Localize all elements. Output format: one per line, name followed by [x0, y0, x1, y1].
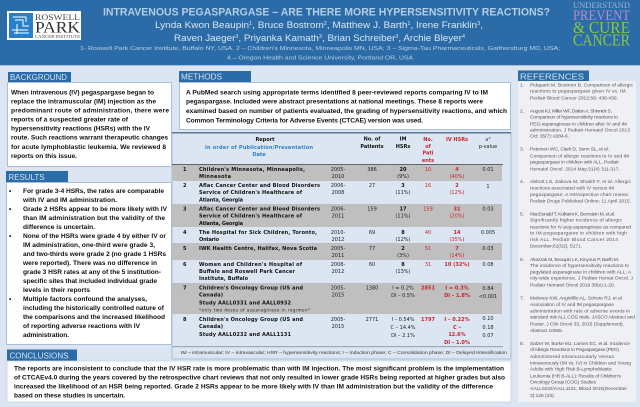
- table header: HSRs: [396, 144, 410, 150]
- reference 3: Hematol Oncol. 2014 May;31(4) 311-317.: [530, 167, 620, 173]
- panel: results: RESULTS: [8, 173, 44, 182]
- row 8: 2005-: [331, 317, 345, 323]
- row 6: 10 (32%): [444, 262, 470, 268]
- row 3: 2006-: [331, 206, 345, 212]
- row 6: Institute, Buffalo: [199, 276, 249, 282]
- panel: background: reports of a suspected greater rate of: [11, 116, 129, 124]
- reference 8: Intravenously (IM vs. IV) in Children and Young: [530, 360, 631, 366]
- row 7: 2015: [332, 292, 344, 298]
- panel: results: For grade 3-4 HSRs, the rates are comparable: [23, 188, 164, 195]
- affiliations line 1: 1- Roswell Park Cancer Institute, Buffalo NY, USA, 2 – Children's Minnesota, Minneapolis MN, USA; 3 – Sigma-Tau Pharmaceuticals, Gaithersburg MD, USA;: [80, 46, 561, 52]
- reference 7: Abstract 10065.: [530, 328, 563, 334]
- row 4: 14: [454, 230, 461, 236]
- row 6: Buffalo and Roswell Park Cancer: [199, 269, 296, 275]
- row 8: 8: [183, 317, 187, 323]
- panel: results: [6, 171, 172, 344]
- row 7: Children's Oncology Group (US and: [199, 286, 303, 292]
- reference 4: Pediatr Drugs Published Online: 11 April 2015.: [530, 199, 631, 205]
- row 7: [183, 286, 497, 312]
- panel: results: Multiple factors confound the analyses,: [23, 296, 147, 303]
- row 1: 2005-: [331, 167, 345, 173]
- table header: ents: [422, 158, 434, 164]
- reference 4: reactions associated with IV versus IM: [530, 186, 614, 192]
- panel: methods: examined based on number of patients evaluated, the grading of hypersensitivity reactions, and which: [186, 108, 507, 115]
- reference 7: 7.: [520, 296, 524, 302]
- logo: Roswell Park: CANCER INSTITUTE: [35, 34, 80, 39]
- row 3: Aflac Cancer Center and Blood Disorders: [199, 206, 320, 212]
- reference 6: The incidence of hypersensitivity reactions to: [530, 263, 629, 269]
- row 7: 7: [183, 286, 187, 292]
- row 2: (11%): [395, 190, 411, 196]
- panel: methods: A PubMed search using appropriate terms identified 8 peer-reviewed reports comparing IV to IM: [186, 90, 488, 96]
- panel: conclusions: CONCLUSIONS: [10, 352, 68, 360]
- reference 1: [520, 83, 634, 102]
- panel: conclusions: increased the likelihood of an HSR being reported. Grade 2 HSRs appear to be more likely with IV than IM administration but the validity of the difference: [14, 384, 493, 390]
- reference 4: 4.: [520, 179, 524, 185]
- row 5: IWK Health Centre, Halifax, Nova Scotia: [199, 246, 317, 252]
- panel: conclusions: [7, 350, 511, 402]
- row 6: 31: [425, 262, 431, 268]
- row 7: I = 0.2%: [392, 286, 414, 292]
- row 5: 77: [369, 246, 375, 252]
- row 2: 2: [455, 183, 459, 189]
- row 8: DI – 1.0%: [444, 340, 470, 346]
- panel: results table: [172, 132, 511, 359]
- row 1: (40%): [449, 174, 465, 180]
- row 7: I = 0.3%: [445, 286, 469, 292]
- row 7: DI – 1.8%: [444, 293, 470, 299]
- authors line 2: , Priyanka Kamath: [238, 33, 319, 43]
- row 1: 10: [425, 167, 431, 173]
- row 1: [183, 167, 494, 180]
- panel: background: [8, 72, 172, 166]
- panel: results: •: [9, 233, 12, 240]
- panel: results: grade 3 HSR rates at any of the 5 institution-: [23, 269, 161, 276]
- row 5: 7: [455, 246, 459, 252]
- row 2: 16: [425, 183, 431, 189]
- row 8: [183, 316, 494, 346]
- row 4: 4: [183, 230, 187, 236]
- row 4: (12%): [395, 237, 411, 243]
- row 4: [183, 230, 495, 243]
- row 3: 2011: [332, 214, 344, 220]
- reference 6: 6.: [520, 257, 524, 263]
- panel: conclusions: based on these studies is uncertain.: [14, 392, 125, 400]
- row 4: 69: [369, 230, 375, 236]
- reference 8: Administered Intramuscularly Versus: [530, 354, 615, 360]
- reference 1: reactions to pegaspargase given IV vs. IM.: [530, 88, 627, 94]
- row 1: 4: [455, 167, 459, 173]
- panel: background: reports on this issue.: [11, 153, 77, 160]
- row 5: 0.03: [482, 246, 494, 252]
- reference 6: pegylated asparaginase in children with ALL: A: [530, 269, 632, 275]
- row 6: 2012: [332, 269, 344, 275]
- row 3: 159: [367, 206, 377, 212]
- panel: conclusions: The reports are inconsistent to conclude that the IV HSR rate is more problematic than with IM injection. The most significant problem is the implementation: [14, 366, 504, 372]
- row 7: Study AALL0331 and AALL0932: [199, 300, 292, 306]
- panel: references: REFERENCES: [520, 72, 584, 82]
- reference 5: [520, 212, 631, 250]
- row 2: [183, 183, 490, 204]
- row 5: 2011: [332, 253, 344, 259]
- panel: background: hypersensitivity reactions (HSRs) with the IV: [11, 126, 151, 132]
- authors line 2: 3: [235, 34, 239, 40]
- row 3: (11%): [395, 214, 411, 220]
- row 6: 0.08: [482, 262, 494, 268]
- table header: No.: [423, 137, 433, 143]
- panel: background: When intravenous (IV) pegaspargase began to: [11, 90, 154, 96]
- panel: results: IM administration, one-third were grade 3,: [23, 242, 155, 249]
- reference 1: 1.: [520, 83, 524, 89]
- reference 5: risk ALL. Pediatr Blood Cancer 2014: [530, 237, 618, 243]
- row 6: (13%): [395, 269, 411, 275]
- authors line 1: 2: [324, 21, 327, 27]
- reference 8: [520, 341, 631, 399]
- reference 5: MacDonald T, Kulkarni K, Bernstein M, et.al.: [530, 212, 615, 218]
- heading: methods: [179, 71, 251, 82]
- reference 2: PEG-asparaginase in children after IV and IM: [530, 122, 627, 128]
- reference 3: Peterson WC, Clark D, Senn SL, et al.: [530, 147, 609, 153]
- table header: IM: [400, 136, 406, 142]
- row 6: 6: [183, 262, 187, 268]
- row 6: 2008-: [331, 262, 345, 268]
- row 7: 1380: [366, 286, 378, 292]
- row 8: 0.07: [482, 333, 494, 339]
- row 7: DI – 0.5%: [391, 293, 415, 299]
- row 5: [183, 246, 494, 259]
- row 3: (20%): [449, 214, 465, 220]
- authors line 2: 4: [462, 34, 465, 40]
- reference 7: Poster. J Clin Oncol 33, 2015 (Supplement).: [530, 322, 624, 328]
- panel: background: BACKGROUND: [10, 73, 67, 82]
- table header: x²: [485, 137, 490, 143]
- panel: background: route. Such reactions warrant therapeutic changes: [11, 134, 168, 142]
- reference 8: of Allergic Reactions to Pegaspargase (PEG): [530, 347, 619, 353]
- table legend: IM – intramuscular; IV – intravascular; HSR – hypersensitivity reactions; I – Induction phase; C – Consolidation phase; DI – Delayed Intensification: [181, 350, 507, 355]
- reference 8: Adults with High Risk B-Lymphoblastic: [530, 367, 613, 373]
- row 8: I – 0.22%: [444, 317, 470, 323]
- row 5: 2005-: [331, 246, 345, 252]
- table header: IV HSRs: [446, 137, 468, 143]
- table header: Date: [252, 152, 266, 158]
- row 2: 1: [486, 184, 490, 190]
- row 2: Atlanta, Georgia: [199, 198, 243, 204]
- panel: results: difference is uncertain.: [23, 224, 95, 231]
- row 8: 0.18: [482, 325, 494, 331]
- row 1: 2010: [332, 174, 344, 180]
- authors line 1: ,: [480, 20, 483, 30]
- logo: Understand Prevent and Cure Cancer: CANCER: [573, 30, 631, 50]
- reference 3: pegaspargase in children with ALL. Pediatr: [530, 160, 619, 166]
- authors line 2: , Brian Schreiber: [322, 33, 395, 43]
- reference 8: Oncology Group (COG) Studies: [530, 380, 597, 386]
- authors line 1: , Matthew J. Barth: [327, 20, 407, 30]
- panel: results: •: [9, 188, 12, 195]
- panel: results: Grade 2 HSRs appear to be more likely with IV: [23, 206, 168, 213]
- panel: results: of reporting adverse reactions with IV: [23, 323, 141, 330]
- table header: [205, 136, 497, 164]
- row 5: 5: [183, 246, 187, 252]
- row 7: *only two doses of asparaginase in regimen*: [199, 308, 310, 312]
- panel: results: than IM administration but the validity of the: [23, 215, 165, 222]
- row 2: 3: [401, 183, 405, 189]
- row 4: Ontario: [199, 237, 220, 243]
- row 2: Service of Children's Healthcare of: [199, 190, 303, 196]
- panel: methods: Common Terminology Criteria for Adverse Events (CTCAE) version was used.: [186, 117, 423, 124]
- row 8: 1797: [421, 317, 435, 323]
- row 3: Atlanta, Georgia: [199, 221, 243, 227]
- panel: background: replace the intramuscular (IM) injection as the: [11, 98, 156, 106]
- panel: background: for acute lymphoblastic leukemia. We reviewed 8: [11, 144, 166, 151]
- row 8: 0.10: [482, 316, 494, 322]
- row 3: 159: [423, 206, 433, 212]
- logo: Roswell Park: ROSWELL: [35, 12, 80, 22]
- authors line 1: 1: [407, 21, 411, 27]
- reference 7: Maloney KW, Angiolillo AL, Schore RJ, et al.: [530, 296, 623, 302]
- logo: Understand Prevent and Cure Cancer: UNDERSTAND: [573, 1, 630, 10]
- panel: conclusions: of CTCAEv4.0 during the years covered by the retrospective chart reviews that not only resulted in lower grade HSRs being reported at higher grades but also: [14, 374, 505, 382]
- reference 2: 2.: [520, 109, 524, 115]
- row 8: Study AALL0232 and AALL1131: [199, 332, 292, 338]
- row 3: 0.03: [482, 206, 494, 212]
- row 1: 386: [367, 167, 377, 173]
- row 4: 40: [425, 230, 431, 236]
- table header: Patients: [360, 144, 384, 150]
- row 2: (12%): [449, 190, 465, 196]
- affiliations line 2: 4 – Oregon Health and Science University, Portland OR, USA: [227, 56, 414, 62]
- row 1: 1: [183, 167, 187, 173]
- authors line 2: 3: [319, 34, 322, 40]
- row 7: <0.001: [479, 294, 497, 300]
- row 8: I – 0.54%: [391, 317, 415, 323]
- authors line 1: 1: [249, 21, 252, 27]
- panel: results: and two-thirds were grade 2 (no grade 1 HSRs: [23, 251, 166, 258]
- authors line 1: Lynda Kwon Beaupin: [155, 20, 240, 30]
- row 3: [183, 206, 494, 227]
- panel: results: specific sites that included individual grade: [23, 278, 157, 285]
- row 3: 3: [183, 206, 187, 212]
- reference 2: administration. J Pediatr Hematol Oncol 2013: [530, 128, 630, 134]
- heading: references: [518, 70, 589, 82]
- reference 5: to IM pegaspargaine in children with high: [530, 231, 627, 237]
- row 7: 0.84: [482, 286, 494, 292]
- reference 6: Pediatr Hematol Oncol 2016 38(e):1-20.: [530, 282, 615, 288]
- panel: background: predominant route of administration, there were: [11, 108, 169, 114]
- reference 3: 3.: [520, 147, 524, 153]
- reference 8: Leukemia (HR B-ALL): Results of Children's: [530, 373, 622, 379]
- row 1: Children's Minnesota, Minneapolis,: [199, 167, 305, 173]
- row 1: 20: [400, 167, 407, 173]
- row 4: (35%): [449, 237, 465, 243]
- panel: methods: pegaspargase. Included were abstract presentations at national meetings. These 8 reports were: [186, 98, 483, 106]
- row 7: 2851: [421, 286, 435, 292]
- table header: In order of Publication/Presentation: [205, 145, 313, 151]
- panel: results: with IV and IM administration.: [22, 197, 117, 204]
- row 4: The Hospital for Sick Children, Toronto,: [199, 230, 317, 236]
- row 8: 2771: [366, 317, 378, 323]
- heading: conclusions: [7, 350, 77, 361]
- reference 8: 8.: [520, 341, 524, 347]
- reference 2: Oct; 35(7): e284-6.: [530, 134, 569, 140]
- row 5: 51: [425, 246, 431, 252]
- row 6: [183, 262, 494, 282]
- row 3: 17: [400, 206, 407, 212]
- authors line 1: 3: [477, 21, 480, 27]
- reference 5: reactions for IV peg-asparaginase as compared: [530, 224, 631, 230]
- title: INTRAVENOUS PEGASPARGASE – ARE THERE MORE HYPERSENSITIVITY REACTIONS?: [103, 7, 550, 19]
- row 2: 2006-: [331, 183, 345, 189]
- reference 5: 5.: [520, 212, 524, 218]
- panel: methods: [179, 71, 510, 130]
- table header: No. of: [364, 136, 381, 142]
- authors line 2: Raven Jaeger: [174, 33, 230, 43]
- logo: Roswell Park: PARK: [35, 20, 80, 36]
- panel: results: levels in their reports: [23, 287, 90, 294]
- row 8: Children's Oncology Group (US and: [199, 317, 303, 323]
- panel: references: [518, 70, 636, 402]
- row 2: Aflac Cancer Center and Blood Disorders: [199, 183, 320, 189]
- panel: results: •: [9, 206, 12, 213]
- row 3: Service of Children's Healthcare of: [199, 214, 303, 220]
- reference 8: 3);126 (23).: [530, 393, 555, 399]
- table header: p-value: [479, 144, 497, 150]
- row 4: 2012: [332, 237, 344, 243]
- reference 7: administration with rate of adverse events in: [530, 308, 630, 314]
- panel: results: administration.: [23, 332, 69, 339]
- row 3: 31: [454, 206, 461, 212]
- row 6: 60: [369, 262, 375, 268]
- reference 4: [520, 179, 632, 205]
- logo: Understand Prevent and Cure Cancer: PREVENT: [573, 8, 630, 24]
- row 8: DI – 2.1%: [391, 333, 415, 339]
- row 8: Canada): [199, 324, 223, 330]
- row 2: 2008: [332, 190, 344, 196]
- reference 2: Comparison of hypersensitivity reactions to: [530, 115, 618, 121]
- row 6: 8: [401, 262, 405, 268]
- reference 8: Salzer W, Burke MJ, Larsen EC, et al. Incidence: [530, 341, 630, 347]
- reference 6: city-wide experience. J Pediatr Hemat Oncol. J: [530, 276, 634, 282]
- authors line 2: , Archie Bleyer: [398, 33, 462, 43]
- table header: of: [425, 144, 432, 150]
- panel: results: including the historically controlled nature of: [23, 305, 165, 312]
- logo: Understand Prevent and Cure Cancer: [573, 1, 631, 50]
- reference 3: [520, 147, 629, 173]
- row 2: 2: [183, 183, 187, 189]
- heading: results: [6, 171, 68, 182]
- reference 7: [520, 296, 635, 334]
- reference 3: Comparison of allergic reactions to IV and IM: [530, 153, 629, 159]
- row 8: 12.6%: [448, 332, 466, 338]
- authors line 1: , Bruce Bostrom: [252, 20, 324, 30]
- reference 1: Pediatr Blood Cancer 2012;58: 436-439.: [530, 96, 618, 102]
- reference 7: standard risk ALL COG trials. JASCO Abstract and: [530, 314, 635, 320]
- row 8: 2015: [332, 324, 344, 330]
- heading: background: [8, 72, 71, 83]
- reference 2: August KJ, Miller WF, Dalton A, Shinnick S.: [530, 109, 612, 115]
- row 1: (9%): [397, 174, 409, 180]
- reference 5: Significantly higher incidence of allergic: [530, 218, 623, 224]
- panel: results: None of the HSRs were grade 4 by either IV or: [23, 233, 166, 240]
- logo: Roswell Park: [7, 11, 81, 40]
- row 1: 0.01: [482, 167, 494, 173]
- reference 4: Abbott LS, Zakova M, Shaikh F, et al. Allergic: [530, 179, 632, 185]
- table row backgrounds: [172, 165, 503, 347]
- reference 7: Association of IV and IM pegaspargase: [530, 302, 614, 308]
- reference 4: pegaspargase: A retrospective chart review.: [530, 192, 629, 198]
- row 4: 8: [401, 230, 405, 236]
- row 7: Canada): [199, 292, 223, 298]
- panel: results: were reported). There was no difference in: [22, 260, 157, 267]
- reference 8: AALL0232/AALL1131, Blood 2015(December: [530, 386, 627, 392]
- row 2: 27: [369, 183, 375, 189]
- table header: Pati: [422, 150, 434, 156]
- row 5: 2: [401, 246, 405, 252]
- row 5: (3%): [397, 253, 409, 259]
- header banner: [0, 0, 640, 66]
- panel: methods: METHODS: [181, 72, 222, 82]
- reference 6: Alrazzak M, Beaupin LK, Kinyoun P, Barth M.: [530, 257, 619, 263]
- reference 5: December;61(S2), S171.: [530, 244, 582, 250]
- authors line 1: , Irene Franklin: [410, 20, 477, 30]
- row 7: 2005-: [331, 286, 345, 292]
- row 8: C – 14.4%: [390, 325, 416, 331]
- reference 1: Pidaparti M, Bostrom B. Comparison of allergic: [530, 83, 634, 89]
- row 5: (14%): [449, 253, 465, 259]
- panel: results: the comparisons and the increased likelihood: [23, 314, 165, 321]
- row 8: C –: [453, 325, 461, 331]
- logo: Understand Prevent and Cure Cancer: & CURE: [573, 18, 630, 37]
- panel: results: •: [9, 296, 12, 303]
- row 4: 0.005: [481, 230, 495, 236]
- row 6: Women and Children's Hospital of: [199, 262, 303, 268]
- reference 6: [520, 257, 634, 288]
- row 4: 2010-: [331, 230, 345, 236]
- authors line 2: 3: [395, 34, 399, 40]
- row 1: Minnesota: [199, 174, 231, 180]
- reference 2: [520, 109, 630, 140]
- table header: Report: [255, 137, 275, 143]
